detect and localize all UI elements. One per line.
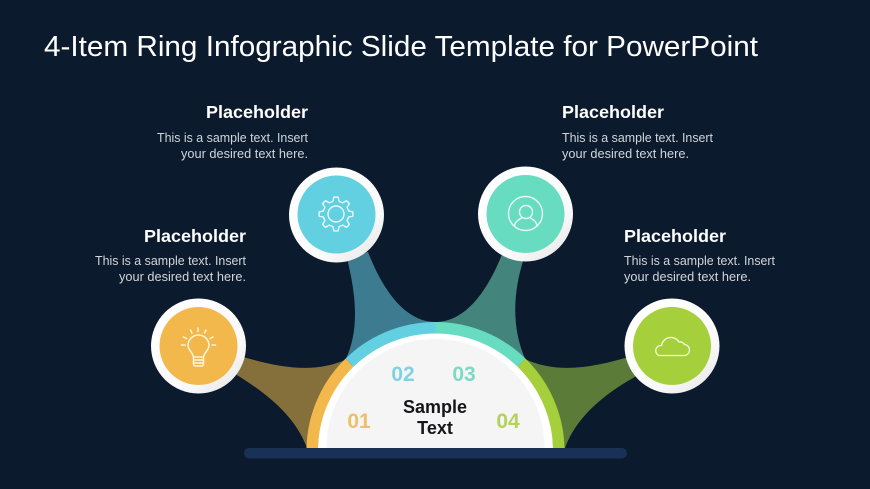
connector: item 1 xyxy=(232,356,347,448)
hub label: Text xyxy=(417,418,453,438)
ring hub xyxy=(306,322,564,448)
hub label: Sample xyxy=(403,397,467,417)
text block: item 2: your desired text here. xyxy=(181,147,308,161)
text block: item 2: This is a sample text. Insert xyxy=(157,131,309,145)
text block: item 4: This is a sample text. Insert xyxy=(624,254,776,268)
node 1: lightbulb xyxy=(151,298,246,394)
connector: item 3 xyxy=(435,252,526,361)
node 3: user xyxy=(478,166,573,262)
text block: item 4: Placeholder xyxy=(624,226,726,246)
text block: item 1: Placeholder xyxy=(144,226,246,246)
connector: item 4 xyxy=(525,356,640,448)
icon: gear xyxy=(319,197,353,231)
ring segment 02 xyxy=(346,322,436,367)
ring segment 03 xyxy=(436,322,526,367)
node 4: cloud xyxy=(624,298,720,394)
number 02: 02 xyxy=(391,363,415,386)
text block: item 3: your desired text here. xyxy=(562,147,689,161)
connector: item 2 xyxy=(345,252,436,361)
base bar xyxy=(244,448,627,458)
number 01: 01 xyxy=(347,410,371,433)
text block: item 2: Placeholder xyxy=(206,102,308,122)
node 2: gear xyxy=(289,168,384,262)
number 03: 03 xyxy=(452,363,476,386)
icon: lightbulb xyxy=(182,328,216,366)
ring segment 01 xyxy=(306,359,354,448)
number 04: 04 xyxy=(496,410,520,433)
ring segment 04 xyxy=(518,359,564,448)
semicircle xyxy=(318,331,553,448)
text block: item 4: your desired text here. xyxy=(624,270,751,284)
icon: cloud xyxy=(656,337,690,356)
text block: item 1: your desired text here. xyxy=(119,270,246,284)
text block: item 3 xyxy=(562,102,714,161)
title: 4-Item Ring Infographic Slide Template for PowerPoint xyxy=(44,31,758,63)
icon: user xyxy=(508,196,542,230)
text block: item 1 xyxy=(95,226,247,284)
text block: item 1: This is a sample text. Insert xyxy=(95,254,247,268)
text block: item 4 xyxy=(624,226,776,284)
text block: item 2 xyxy=(157,102,309,161)
text block: item 3: This is a sample text. Insert xyxy=(562,131,714,145)
text block: item 3: Placeholder xyxy=(562,102,664,122)
